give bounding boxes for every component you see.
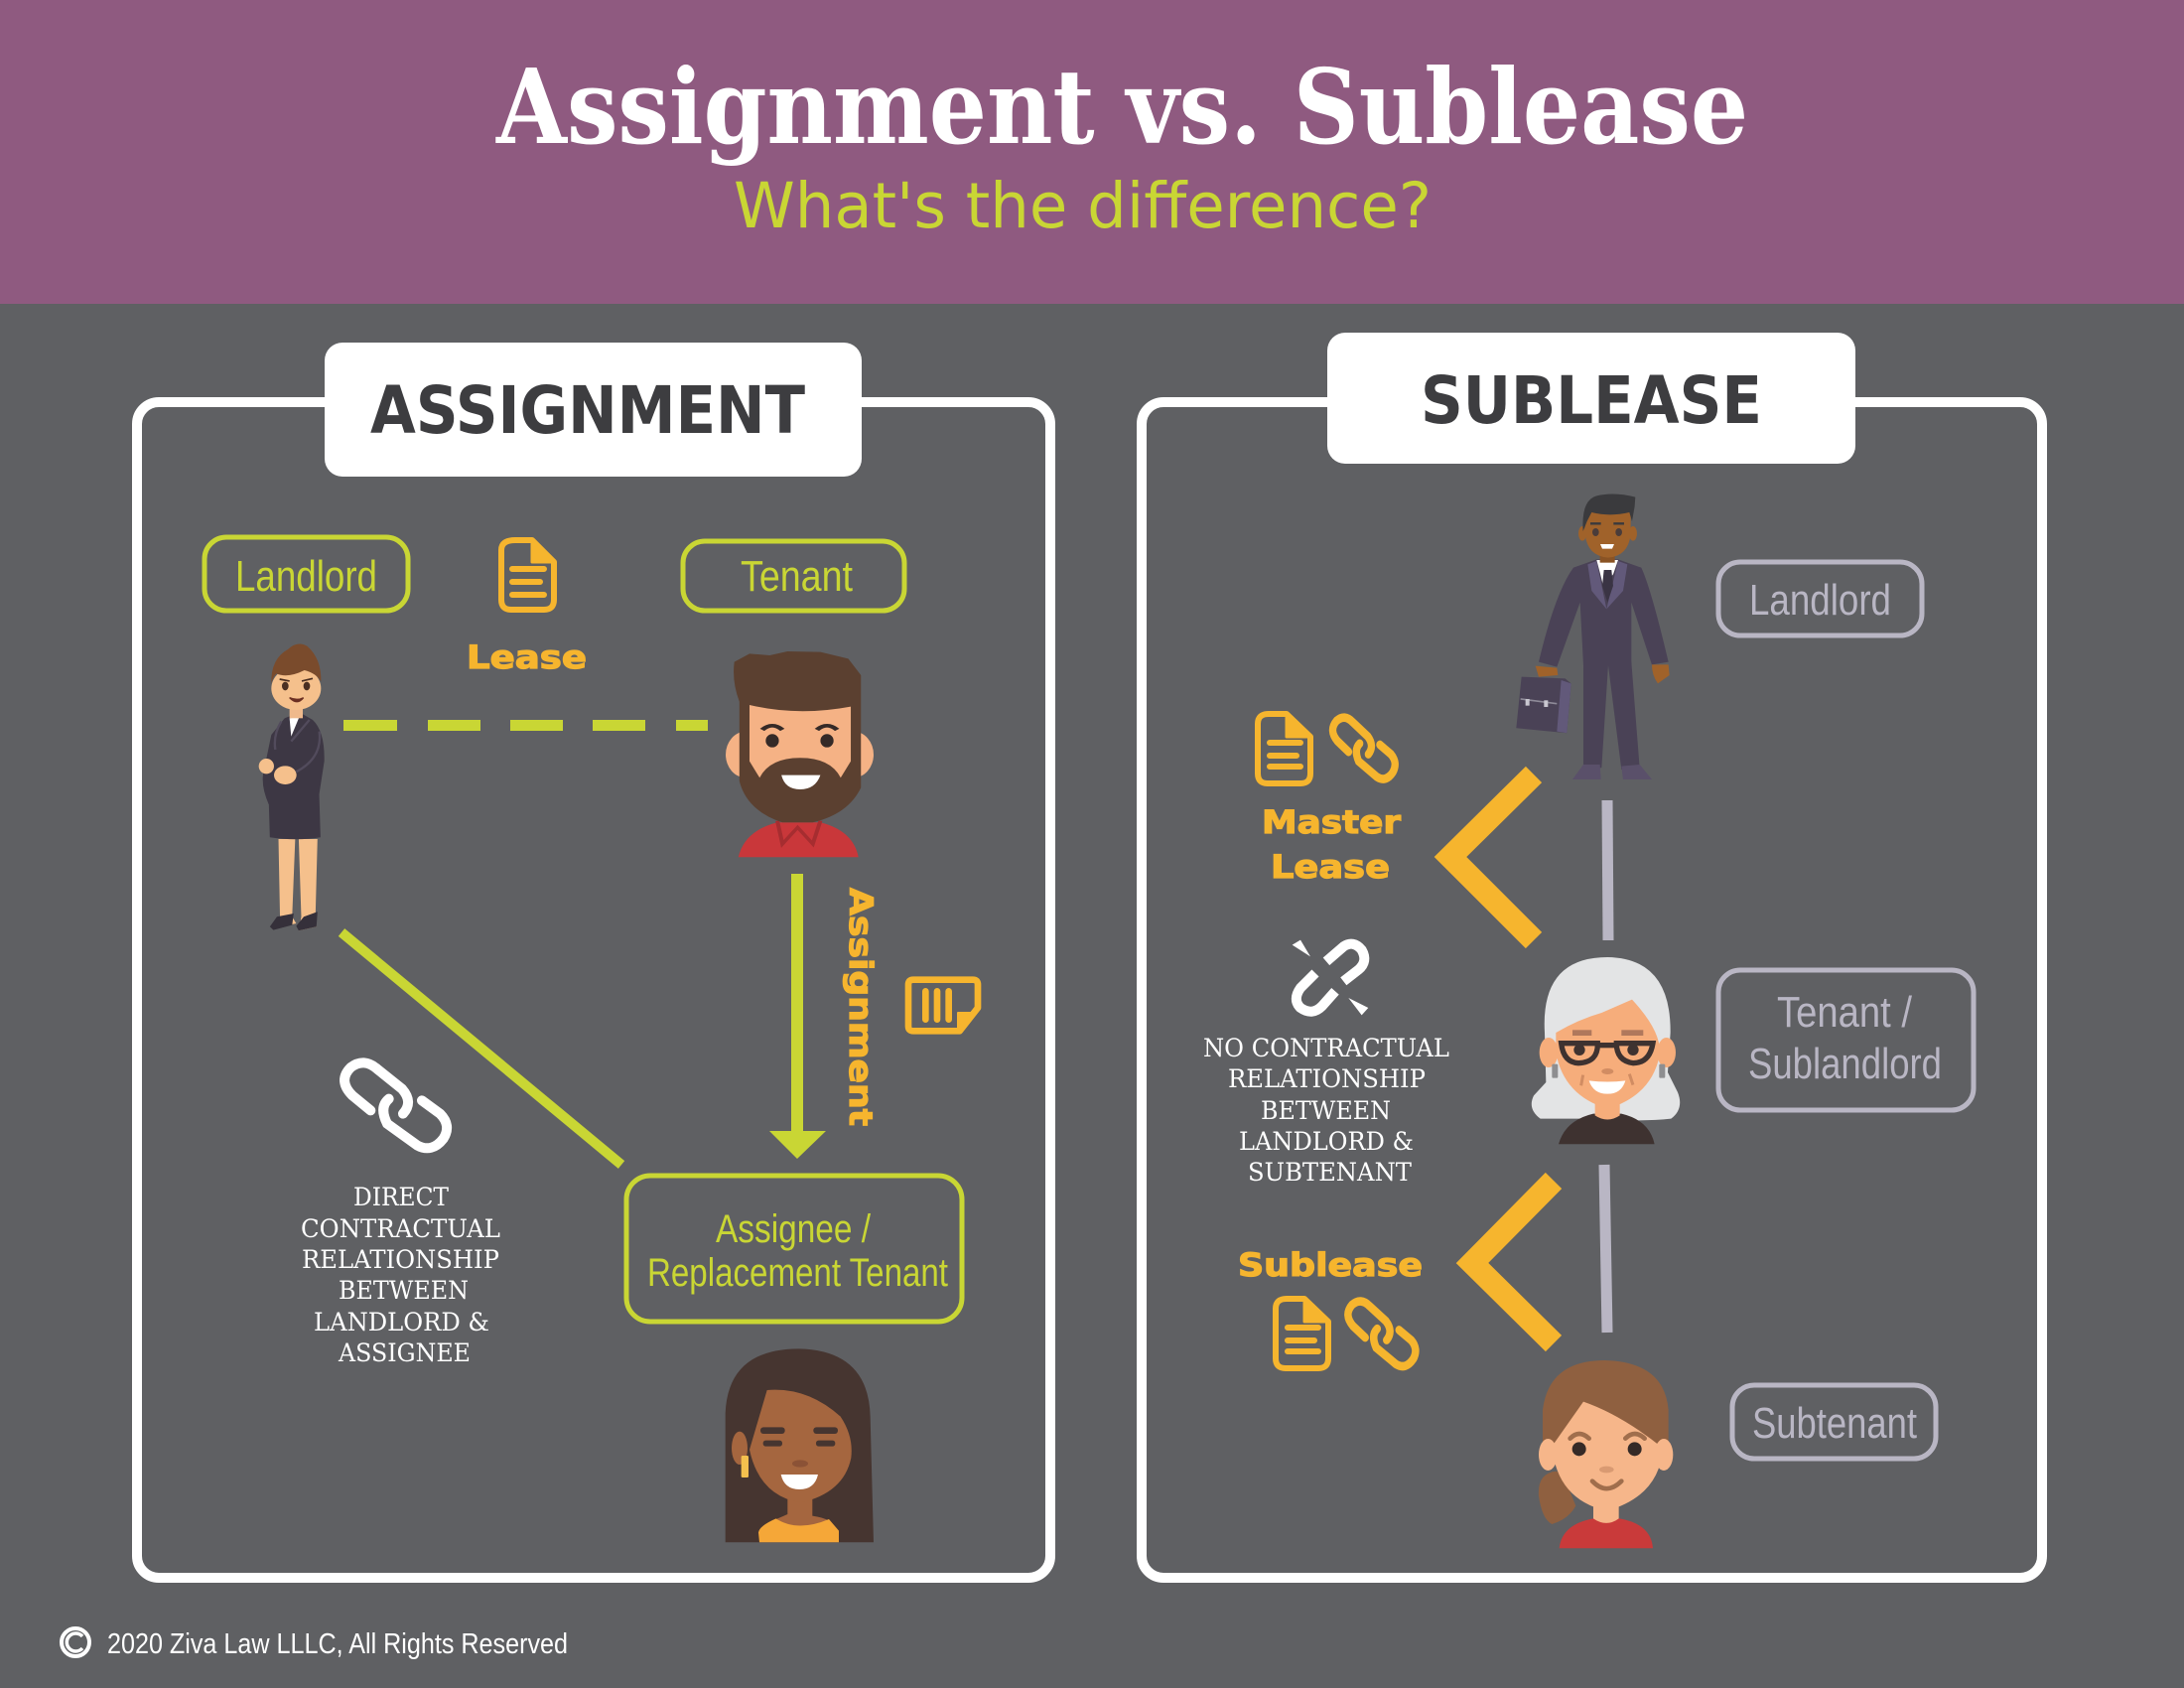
assignment label (vertical): Assignment [842, 888, 880, 1126]
copyright footer: 2020 Ziva Law LLLC, All Rights Reserved [107, 1628, 568, 1660]
label: assignee / replacement tenant: Replacement Tenant [647, 1251, 948, 1295]
master lease label: Lease [1271, 848, 1390, 886]
connector: tenant to subtenant [1604, 1165, 1607, 1333]
icon: assignment note [908, 980, 978, 1031]
label: landlord [1718, 562, 1922, 635]
text: direct contractual relationship: LANDLORD & [314, 1308, 489, 1336]
text: no contractual relationship: SUBTENANT [1248, 1158, 1412, 1187]
text: no contractual relationship: LANDLORD & [1239, 1127, 1414, 1156]
text: direct contractual relationship [301, 1183, 500, 1367]
illustration: landlord man with briefcase [1516, 493, 1670, 779]
master lease label [1262, 803, 1401, 886]
illustration: assignee woman [726, 1348, 874, 1542]
label: subtenant [1732, 1385, 1936, 1459]
illustration: bearded tenant [726, 651, 874, 857]
illustration: female landlord [259, 643, 325, 930]
illustration: tenant / sublandlord grey-haired woman [1532, 957, 1680, 1144]
illustration: subtenant woman [1539, 1360, 1673, 1548]
label: assignee / replacement tenant: Assignee / [716, 1207, 872, 1251]
text: direct contractual relationship: CONTRACTUAL [301, 1214, 500, 1243]
text: direct contractual relationship: ASSIGNEE [338, 1338, 471, 1367]
label: tenant / sublandlord [1718, 970, 1974, 1110]
text: direct contractual relationship: RELATIONSHIP [302, 1245, 499, 1274]
connector: landlord to tenant [1607, 800, 1608, 940]
label: landlord: Landlord [1749, 576, 1891, 625]
subtitle: What's the difference? [734, 170, 1432, 242]
label: tenant [683, 541, 904, 611]
label: assignee / replacement tenant [626, 1176, 962, 1322]
icon: white chain link [344, 1062, 447, 1148]
text: no contractual relationship [1203, 1034, 1449, 1187]
sublease label: Sublease [1238, 1246, 1423, 1284]
chevron: master lease [1450, 774, 1534, 940]
label: tenant / sublandlord: Tenant / [1777, 988, 1913, 1037]
title: Assignment vs. Sublease [495, 46, 1748, 168]
diagonal line: landlord to assignee [341, 932, 621, 1165]
text: no contractual relationship: BETWEEN [1261, 1096, 1391, 1125]
icon: broken chain [1293, 940, 1368, 1015]
label: landlord: Landlord [235, 552, 377, 601]
heading tab: assignment [325, 343, 862, 477]
arrow: tenant to assignee [769, 874, 826, 1159]
text: direct contractual relationship: BETWEEN [339, 1276, 469, 1305]
label: subtenant: Subtenant [1752, 1399, 1917, 1448]
icon: lease document [501, 540, 554, 610]
icon: master lease document [1258, 714, 1310, 783]
text: no contractual relationship: RELATIONSHIP [1228, 1064, 1426, 1093]
icon: sublease document [1276, 1299, 1328, 1368]
master lease label: Master [1262, 803, 1401, 841]
icon: master lease chain [1332, 718, 1395, 779]
lease label: Lease [467, 638, 587, 676]
chevron: sublease [1472, 1181, 1554, 1343]
header banner [0, 0, 2184, 304]
heading tab: sublease [1327, 333, 1855, 464]
heading tab: sublease: SUBLEASE [1421, 362, 1762, 439]
text: no contractual relationship: NO CONTRACTUAL [1203, 1034, 1449, 1062]
label: tenant: Tenant [741, 552, 853, 601]
text: direct contractual relationship: DIRECT [353, 1183, 449, 1211]
label: landlord [205, 537, 408, 611]
label: tenant / sublandlord: Sublandlord [1748, 1040, 1942, 1088]
panel: assignment [137, 343, 1050, 1578]
panel: sublease [1142, 333, 2042, 1578]
icon: sublease chain [1348, 1302, 1416, 1366]
heading tab: assignment: ASSIGNMENT [370, 372, 805, 449]
dashed line: landlord to tenant [343, 720, 708, 731]
